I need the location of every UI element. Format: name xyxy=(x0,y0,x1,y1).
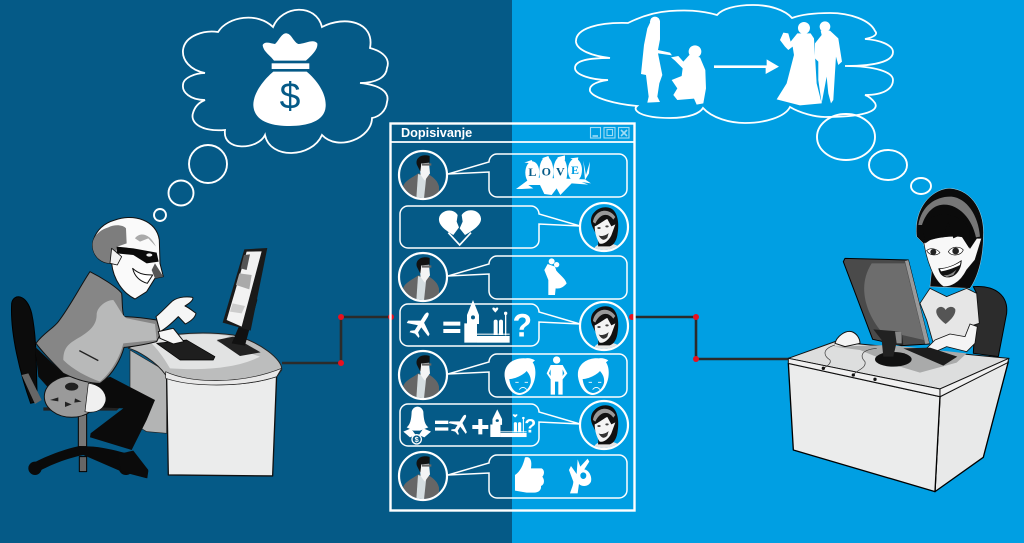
left panel background xyxy=(0,0,512,543)
monitor xyxy=(217,248,267,356)
icon: love birds on branch: V xyxy=(556,164,565,178)
message 5: man, two sad women and man xyxy=(399,351,627,399)
desk front xyxy=(167,375,277,476)
keyboard xyxy=(903,348,957,366)
message 7: man, thumbs up and OK hand xyxy=(399,452,627,500)
head xyxy=(92,217,163,299)
scammer at desk xyxy=(11,217,282,478)
desk top xyxy=(788,342,1009,389)
icon: sad face xyxy=(578,358,609,395)
cables and desk clips xyxy=(822,345,877,381)
icon: plane xyxy=(403,306,439,342)
icon: london skyline xyxy=(490,409,527,437)
message 3: man, dancing couple xyxy=(399,253,627,301)
desk front side xyxy=(788,363,940,492)
icon: love birds on branch: O xyxy=(542,164,551,178)
icon: couple kissing xyxy=(544,258,567,295)
thought bubbles xyxy=(154,145,227,221)
monitor xyxy=(843,258,929,367)
question mark: ? xyxy=(524,417,536,438)
heart on shirt xyxy=(936,307,955,324)
hands xyxy=(156,297,196,332)
icon: money bag: $ xyxy=(280,74,301,116)
icon: love birds on branch xyxy=(516,155,591,195)
desk right side xyxy=(935,362,1008,492)
equals sign xyxy=(443,322,460,333)
icon: OK hand xyxy=(569,459,591,493)
icon: proposal, arrow and wedding couple xyxy=(641,17,842,105)
connector: scammer computer to chat window xyxy=(282,314,394,366)
mouse hand xyxy=(835,331,860,347)
connector: chat window to woman computer xyxy=(629,314,790,362)
t-shirt xyxy=(920,288,979,345)
message 1: man, love birds xyxy=(399,151,627,199)
trousers and shoe xyxy=(35,347,155,450)
window frame xyxy=(390,124,634,510)
keyboard xyxy=(157,340,215,360)
chat window xyxy=(390,124,634,510)
desk top xyxy=(128,333,282,385)
message 2: woman, broken heart xyxy=(400,203,628,252)
arm and hand on keyboard xyxy=(927,324,977,353)
thought bubbles xyxy=(817,114,931,194)
icon: sad face xyxy=(505,358,535,395)
icon: thumbs up xyxy=(515,457,544,493)
icon: broken heart with silhouettes xyxy=(439,210,481,245)
window controls xyxy=(590,128,629,138)
plus sign xyxy=(472,419,488,434)
question mark: ? xyxy=(513,308,532,344)
rear desk panel xyxy=(130,350,167,433)
message 6: woman, money equals plane plus London xyxy=(400,401,628,450)
thought cloud: scammer dreams of money xyxy=(154,10,388,221)
icon: money bag xyxy=(253,33,326,126)
hair and head xyxy=(916,188,983,288)
icon: love birds on branch: E xyxy=(571,163,579,177)
icon: london skyline xyxy=(464,300,510,343)
equals sign xyxy=(435,421,448,431)
chair xyxy=(11,297,148,478)
message 4: woman, plane ticket to London question xyxy=(400,300,628,351)
thought cloud: woman dreams of marriage xyxy=(575,5,931,194)
right panel background xyxy=(512,0,1024,543)
icon: man silhouette xyxy=(547,356,567,395)
jacket xyxy=(36,272,161,383)
window title: Dopisivanje xyxy=(401,126,472,140)
chair xyxy=(973,286,1007,357)
woman at desk xyxy=(788,188,1009,492)
pattern on chair seat xyxy=(44,376,106,417)
icon: woman asking for money: $ xyxy=(415,435,419,444)
icon: love birds on branch: L xyxy=(528,165,536,179)
icon: plane xyxy=(446,410,474,438)
